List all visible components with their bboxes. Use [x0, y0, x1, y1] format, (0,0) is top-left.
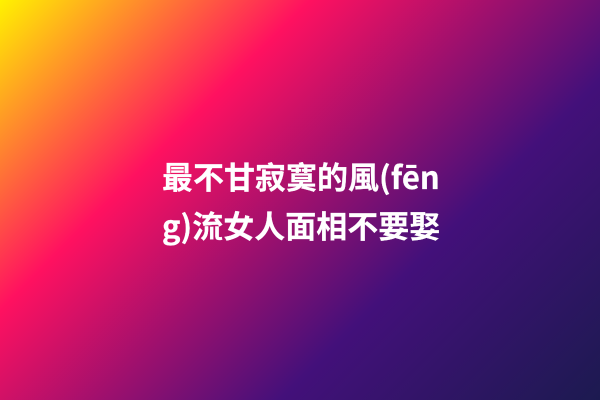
title: 最不甘寂寞的風(fēn [162, 153, 440, 198]
title [162, 153, 440, 247]
title: g)流女人面相不要娶 [162, 202, 440, 247]
